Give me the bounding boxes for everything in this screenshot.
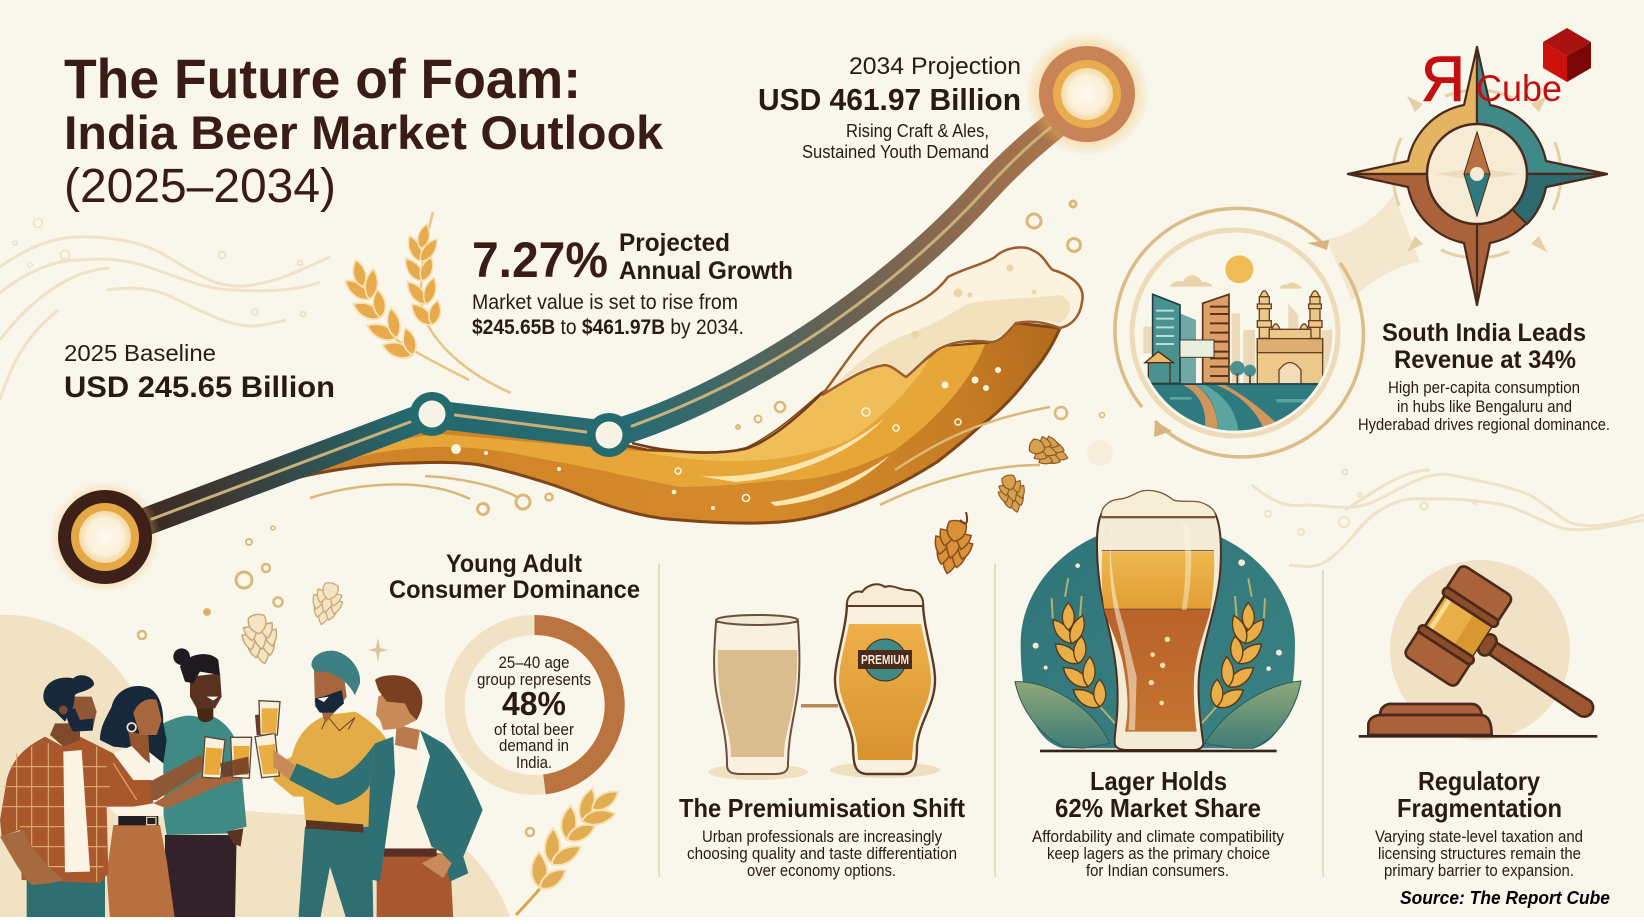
donut chart: 25–40 age [498,654,570,672]
donut chart: demand in [499,737,569,755]
premiumisation text: choosing quality and taste differentiation [687,844,957,863]
beer body [296,323,1060,523]
sun [1225,255,1253,283]
icon: beige hops [239,579,388,667]
2034 projection label: Sustained Youth Demand [802,141,989,162]
lager text: 62% Market Share [1055,793,1261,823]
title: India Beer Market Outlook [64,106,664,159]
2034 projection label: 2034 Projection [849,53,1021,80]
icon: lager glass [1015,490,1301,752]
growth callout: $245.65B to $461.97B by 2034. [472,316,744,339]
lager text: for Indian consumers. [1086,861,1229,880]
end node [1025,32,1149,156]
decorative left swirl [0,218,330,400]
source note: Source: The Report Cube [1400,888,1610,908]
person four [273,651,386,920]
donut chart: India. [516,754,552,772]
regulatory text: Fragmentation [1397,793,1562,823]
2034 projection label: Rising Craft & Ales, [846,120,989,141]
2025 baseline label [64,340,335,404]
lager text: keep lagers as the primary choice [1047,844,1270,863]
city ring [1115,208,1363,457]
donut chart [454,625,615,785]
premiumisation text: Urban professionals are increasingly [702,827,942,846]
south india text: Revenue at 34% [1394,346,1576,374]
beer wave [296,247,1083,523]
young adult heading: Young Adult [446,550,583,578]
people illustration [0,648,483,920]
growth callout [472,229,793,339]
south india text: in hubs like Bengaluru and [1397,397,1572,416]
people backdrop [0,615,510,917]
premiumisation text: The Premiumisation Shift [679,793,965,823]
teal egg [1021,523,1295,748]
icon: hops near beer [929,431,1072,577]
glass [1097,513,1221,750]
2025 baseline label: USD 245.65 Billion [64,371,335,404]
lager text: Affordability and climate compatibility [1032,827,1284,846]
mid node two [587,413,631,457]
south india text [1358,319,1610,434]
title [64,47,664,213]
2034 projection label: USD 461.97 Billion [758,82,1021,117]
lager text [1032,766,1284,880]
skyscrapers [1180,313,1196,383]
icon: premium glass: PREMIUM [861,652,909,667]
charminar [1257,291,1323,384]
donut chart: 48% [502,685,566,722]
icon: premium glass [830,584,940,778]
logo [1325,28,1607,305]
brown top streak [632,393,822,453]
2025 baseline label: 2025 Baseline [64,340,216,366]
growth callout: Annual Growth [619,257,793,285]
growth callout: Market value is set to rise from [472,291,738,314]
compass connector [1325,195,1420,300]
logo cube [1543,28,1591,82]
gavel base [1380,704,1482,715]
dividers [659,564,1323,877]
leaves [1015,682,1110,748]
young adult heading [389,550,640,604]
lager text: Lager Holds [1090,766,1227,796]
logo wordmark: Я [1421,43,1465,115]
regulatory text [1375,766,1583,880]
person three [163,648,247,920]
regulatory text: Regulatory [1418,766,1540,796]
person two [100,686,249,920]
city illustration [1115,208,1363,457]
start node [49,481,161,593]
premiumisation text [679,793,965,880]
regulatory text: primary barrier to expansion. [1384,861,1574,880]
2034 projection label [758,53,1021,162]
title: The Future of Foam: [64,47,581,110]
floating bubbles and sweeps [138,201,1113,836]
compass [1348,47,1607,305]
icon: wheat stalks [336,212,511,393]
icon: wheat bottom [502,773,642,915]
young adult heading: Consumer Dominance [389,576,640,604]
ground and road [1152,384,1318,431]
gavel head and handle [1402,563,1621,758]
small pavilion [1145,352,1173,363]
growth callout: 7.27% [472,232,608,288]
person one [0,675,213,920]
skyline [1143,303,1333,383]
beer gold layer [340,344,985,487]
south india text: South India Leads [1382,319,1586,347]
beer glasses right [255,701,295,780]
title: (2025–2034) [64,160,336,213]
icon: plain glass [708,615,808,780]
mid node one [410,392,454,436]
trees [1230,361,1245,376]
donut chart: group represents [477,671,591,689]
wheat in egg [1048,578,1268,723]
timeline line [105,125,1055,537]
decorative right swirl [1252,470,1644,567]
south india text: Hyderabad drives regional dominance. [1358,415,1610,434]
premiumisation text: over economy options. [747,861,896,880]
regulatory text: Varying state-level taxation and [1375,827,1583,846]
regulatory text: licensing structures remain the [1378,844,1581,863]
growth callout: Projected [619,229,730,257]
billboard [1180,340,1214,357]
connector dash [801,704,838,708]
beer glasses left [202,737,252,778]
beer bubbles [451,367,1001,510]
logo wordmark [1421,43,1562,115]
icon: gavel [1359,560,1621,758]
person five [289,675,483,920]
logo wordmark: Cube [1476,68,1562,109]
beer foam [822,247,1083,395]
donut chart: of total beer [494,721,574,739]
south india text: High per-capita consumption [1388,378,1580,397]
clouds [1170,275,1302,289]
